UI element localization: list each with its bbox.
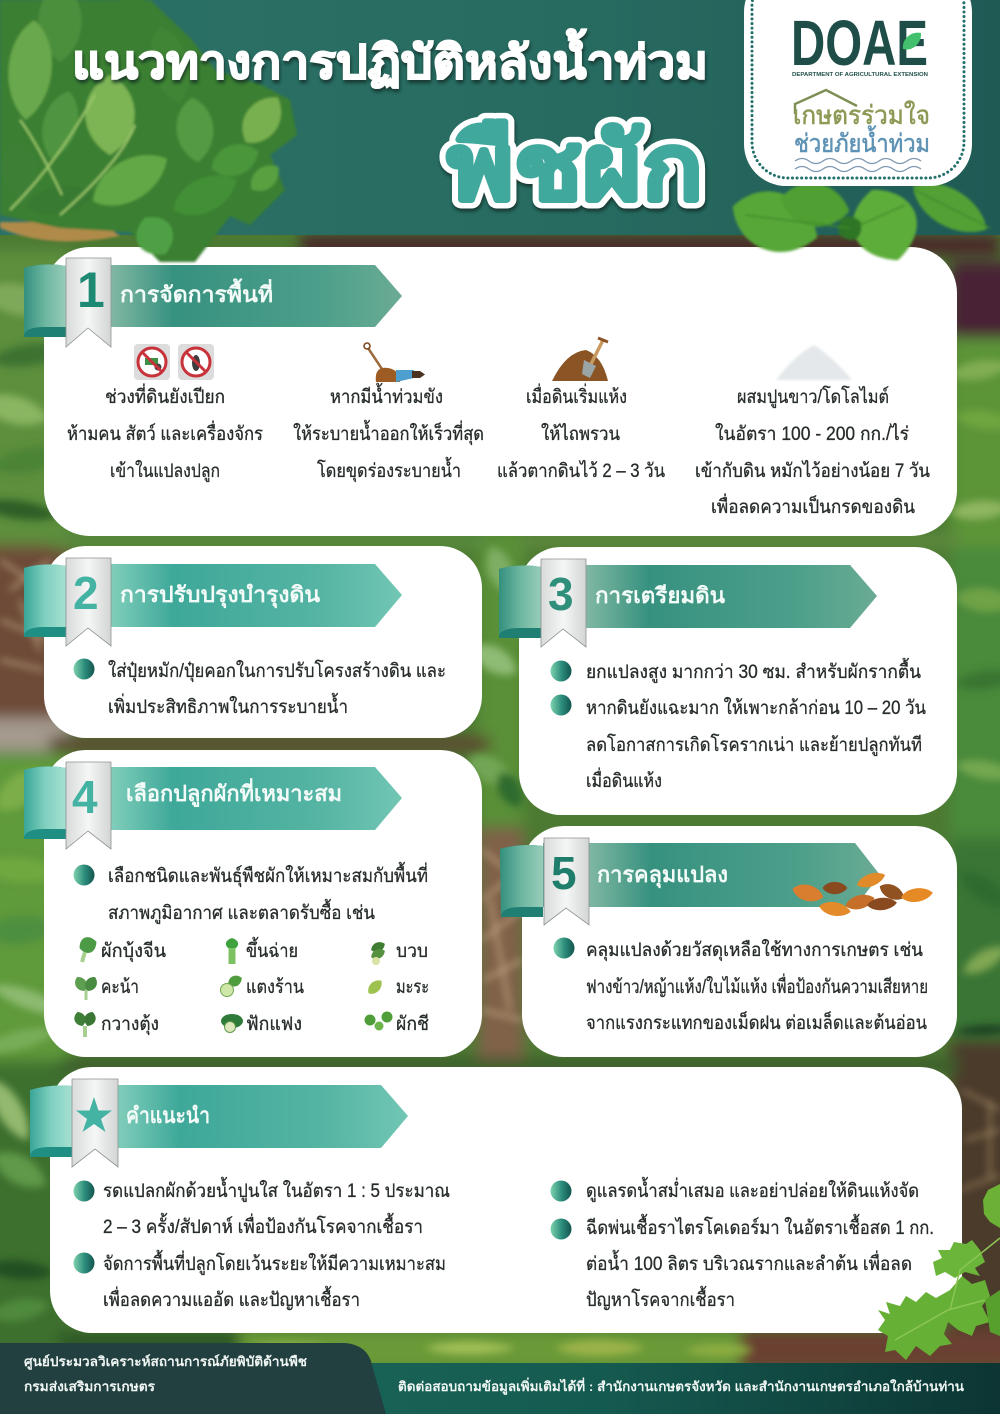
bullet list: soil preparation: ยกแปลงสูง มากกว่า 30 ซม. สำหรับผักรากตื้น [586, 658, 921, 683]
footer: agency block [0, 1343, 386, 1414]
ribbon heading 3: 3 [548, 568, 574, 620]
icon: no tractor, no people [134, 344, 214, 380]
icon: celery [226, 938, 238, 964]
text: หากมีน้ำท่วมขัง: หากมีน้ำท่วมขัง [330, 383, 443, 408]
icon: water spinach [77, 934, 99, 962]
text: เมื่อดินเริ่มแห้ง [497, 383, 665, 482]
panel 2: การปรับปรุงบำรุงดิน [24, 546, 482, 738]
bullet: choose varieties: สภาพภูมิอากาศ และตลาดรับซื้อ เช่น [108, 899, 375, 924]
ribbon heading 3: การเตรียมดิน [595, 583, 725, 608]
panel 5: การคลุมแปลง [500, 826, 957, 1057]
bullet list: right recommendations: ต่อน้ำ 100 ลิตร บริเวณรากและลำต้น เพื่อลด [586, 1250, 912, 1275]
ribbon heading 2: การปรับปรุงบำรุงดิน [120, 582, 320, 609]
vegetable list: กวางตุ้ง [101, 1014, 159, 1036]
ribbon heading 5: 5 [551, 847, 577, 899]
text: ผสมปูนขาว/โดโลไมต์: ผสมปูนขาว/โดโลไมต์ [737, 385, 889, 408]
text: ผสมปูนขาว/โดโลไมต์: เพื่อลดความเป็นกรดของดิน [711, 493, 915, 518]
ribbon heading 4: เลือกปลูกผักที่เหมาะสม [126, 777, 342, 808]
icon: dry leaves [790, 869, 934, 918]
header: dark teal chalkboard banner [0, 0, 1000, 235]
icon: cucumber [220, 973, 244, 996]
bullet list: mulching [554, 938, 928, 1034]
text: เมื่อดินเริ่มแห้ง: ให้ไถพรวน [541, 423, 620, 445]
text: เมื่อดินเริ่มแห้ง: เมื่อดินเริ่มแห้ง [526, 383, 627, 408]
subtitle: พืชผัก: พืชผัก [447, 117, 703, 219]
bullet list: soil preparation [550, 658, 926, 792]
vegetable list: บวบ [396, 941, 428, 962]
bullet list: right recommendations: ดูแลรดน้ำสม่ำเสมอ และอย่าปล่อยให้ดินแห้งจัด [586, 1177, 919, 1202]
bullet list: left recommendations [74, 1177, 450, 1311]
icon: winter melon [221, 1014, 243, 1032]
ribbon heading 1: 1 [77, 262, 105, 318]
ribbon heading 1 [24, 258, 402, 347]
illustration: spinach bunch, top left [0, 0, 297, 263]
ribbon heading 4: 4 [72, 771, 98, 823]
vegetable list: ฟักแฟง [246, 1014, 302, 1035]
text: หากมีน้ำท่วมขัง [293, 383, 484, 483]
text: ช่วงที่ดินยังเปียก [67, 383, 263, 482]
bullet list: right recommendations: ฉีดพ่นเชื้อราไตรโคเดอร์มา ในอัตราเชื้อสด 1 กก. [586, 1214, 934, 1239]
text: หากมีน้ำท่วมขัง: โดยขุดร่องระบายน้ำ [317, 457, 461, 483]
footer: agency block: ศูนย์ประมวลวิเคราะห์สถานการณ์ภัยพิบัติด้านพืช [24, 1354, 307, 1370]
vegetable list [72, 934, 429, 1037]
icon: coriander [364, 1012, 392, 1030]
vegetable list: ผักชี [396, 1013, 429, 1035]
subtitle: พืชผัก: พืชผัก [447, 117, 703, 219]
text: ช่วงที่ดินยังเปียก: เข้าในแปลงปลูก [110, 460, 220, 482]
icon: bok choy [72, 1010, 98, 1037]
vegetable list: คะน้า [101, 977, 139, 998]
vegetable list: แตงร้าน [246, 977, 304, 998]
bullet list: soil improvement: ใส่ปุ๋ยหมัก/ปุ๋ยคอกในการปรับโครงสร้างดิน และ [108, 659, 446, 683]
ribbon heading 5: การคลุมแปลง [597, 862, 728, 889]
ribbon heading 1: การจัดการพื้นที่ [120, 278, 273, 307]
ribbon heading 2: 2 [73, 567, 99, 619]
panel 6: คำแนะนำ [30, 1067, 962, 1333]
bullet list: soil improvement: เพิ่มประสิทธิภาพในการระบายน้ำ [108, 693, 348, 718]
vegetable list: ผักบุ้งจีน [101, 940, 166, 963]
text: ผสมปูนขาว/โดโลไมต์: เข้ากับดิน หมักไว้อย่างน้อย 7 วัน [695, 460, 930, 482]
bullet list: mulching: จากแรงกระแทกของเม็ดฝน ต่อเมล็ดและต้นอ่อน [586, 1010, 927, 1034]
vegetable list: มะระ [396, 977, 429, 998]
bullet list: soil preparation: หากดินยังแฉะมาก ให้เพาะกล้าก่อน 10 – 20 วัน [586, 697, 926, 719]
bullet list: soil improvement [74, 658, 446, 718]
title: แนวทางการปฏิบัติหลังน้ำท่วม [72, 28, 708, 88]
icon: drainage ditch with shovel [364, 343, 425, 382]
bullet list: left recommendations: จัดการพื้นที่ปลูกโดยเว้นระยะให้มีความเหมาะสม [103, 1250, 446, 1275]
bullet: choose varieties: เลือกชนิดและพันธุ์พืชผักให้เหมาะสมกับพื้นที่ [108, 862, 428, 888]
ribbon heading: recommendation [30, 1079, 408, 1167]
text: ช่วงที่ดินยังเปียก: ห้ามคน สัตว์ และเครื่องจักร [67, 420, 263, 445]
icon: bitter gourd [365, 977, 385, 997]
icon: kale [72, 974, 100, 1000]
logo: DOAE: DOAE [791, 7, 928, 79]
ribbon heading 5 [500, 838, 880, 925]
icon: soil mound with shovel [552, 338, 608, 381]
bullet list: left recommendations: เพื่อลดความแออัด และปัญหาเชื้อรา [103, 1286, 360, 1311]
vegetable list: ขึ้นฉ่าย [246, 937, 298, 962]
text: ผสมปูนขาว/โดโลไมต์: ในอัตรา 100 - 200 กก./ไร่ [715, 423, 909, 445]
bullet list: left recommendations: รดแปลกผักด้วยน้ำปูนใส ในอัตรา 1 : 5 ประมาณ [103, 1177, 450, 1202]
footer: agency block: กรมส่งเสริมการเกษตร [24, 1379, 155, 1394]
text: เมื่อดินเริ่มแห้ง: แล้วตากดินไว้ 2 – 3 วัน [497, 460, 665, 482]
illustration: basil leaves, top right [723, 171, 996, 271]
ribbon heading 2 [24, 558, 402, 646]
text: หากมีน้ำท่วมขัง: ให้ระบายน้ำออกให้เร็วที่สุด [293, 420, 484, 446]
text: ช่วงที่ดินยังเปียก: ช่วงที่ดินยังเปียก [105, 383, 225, 408]
ribbon heading: recommendation: คำแนะนำ [126, 1103, 210, 1128]
panel: logo card [744, 0, 972, 186]
illustration: coriander leaves, bottom right [878, 1184, 1000, 1360]
footer: contact bar: ติดต่อสอบถามข้อมูลเพิ่มเติมได้ที่ : สำนักงานเกษตรจังหวัด และสำนักงานเกษตรอำเภอใกล้บ้านท่าน [398, 1377, 964, 1395]
bullet list: right recommendations [550, 1177, 934, 1311]
bullet list: soil preparation: เมื่อดินแห้ง [586, 767, 662, 792]
ribbon heading 3 [499, 559, 877, 647]
panel 3: การเตรียมดิน [499, 547, 957, 815]
strip above first card [300, 234, 1000, 256]
bullet list: mulching: คลุมแปลงด้วยวัสดุเหลือใช้ทางการเกษตร เช่น [586, 939, 923, 962]
footer: contact bar [0, 1363, 1000, 1414]
panel 1: การจัดการพื้นที่ [24, 247, 957, 536]
bullet list: right recommendations: ปัญหาโรคจากเชื้อรา [586, 1286, 735, 1311]
logo: เกษตรร่วมใจ ช่วยภัยน้ำท่วม [793, 90, 930, 172]
panel 4: เลือกปลูกผักที่เหมาะสม [24, 750, 482, 1057]
text: ผสมปูนขาว/โดโลไมต์ [695, 385, 930, 518]
bullet: choose varieties [74, 862, 428, 924]
logo: DOAE: DEPARTMENT OF AGRICULTURAL EXTENSION [792, 72, 928, 78]
ribbon heading 4 [24, 762, 402, 849]
icon: luffa [369, 940, 387, 965]
bullet list: soil preparation: ลดโอกาสการเกิดโรครากเน่า และย้ายปลูกทันที [586, 733, 922, 756]
logo: เกษตรร่วมใจ ช่วยภัยน้ำท่วม: ช่วยภัยน้ำท่วม [794, 125, 930, 158]
icon: pile of white lime [776, 345, 852, 380]
bullet list: left recommendations: 2 – 3 ครั้ง/สัปดาห์ เพื่อป้องกันโรคจากเชื้อรา [103, 1213, 423, 1238]
logo: เกษตรร่วมใจ ช่วยภัยน้ำท่วม: เกษตรร่วมใจ [793, 100, 930, 130]
